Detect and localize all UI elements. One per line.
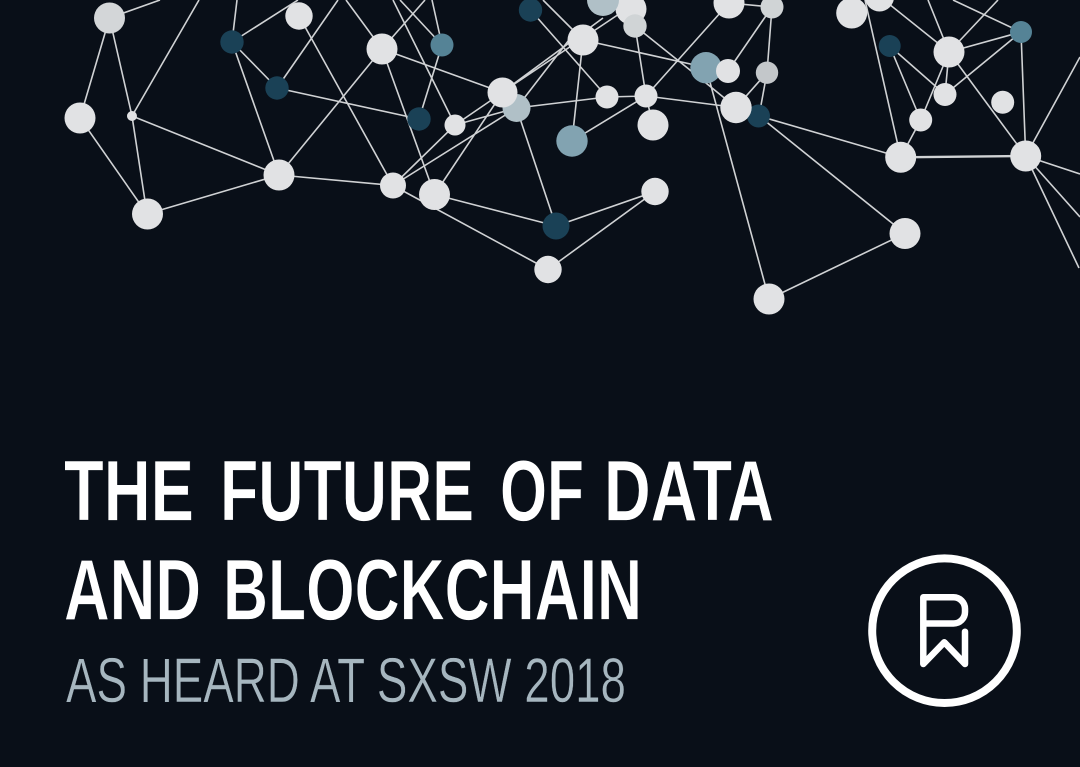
network nodes: overlapping top layer xyxy=(488,0,784,123)
subtitle: AS HEARD AT SXSW 2018 xyxy=(66,646,626,716)
title line 1: DATA xyxy=(604,444,774,540)
network nodes: light xyxy=(64,0,1041,314)
network connecting lines xyxy=(80,0,1080,299)
logo ring xyxy=(872,558,1017,703)
network nodes: teal and pale blue xyxy=(430,0,1032,157)
title line 1: THE xyxy=(64,444,194,540)
title line 2: AND xyxy=(64,542,201,638)
title line 1: FUTURE xyxy=(220,444,474,540)
title xyxy=(64,444,774,638)
logo: PW in circle xyxy=(872,558,1017,703)
logo monogram xyxy=(923,597,965,664)
title line 2: BLOCKCHAIN xyxy=(223,542,642,638)
title line 1: OF xyxy=(500,444,584,540)
network nodes: dark blue xyxy=(220,0,901,239)
network graph illustration xyxy=(64,0,1080,314)
